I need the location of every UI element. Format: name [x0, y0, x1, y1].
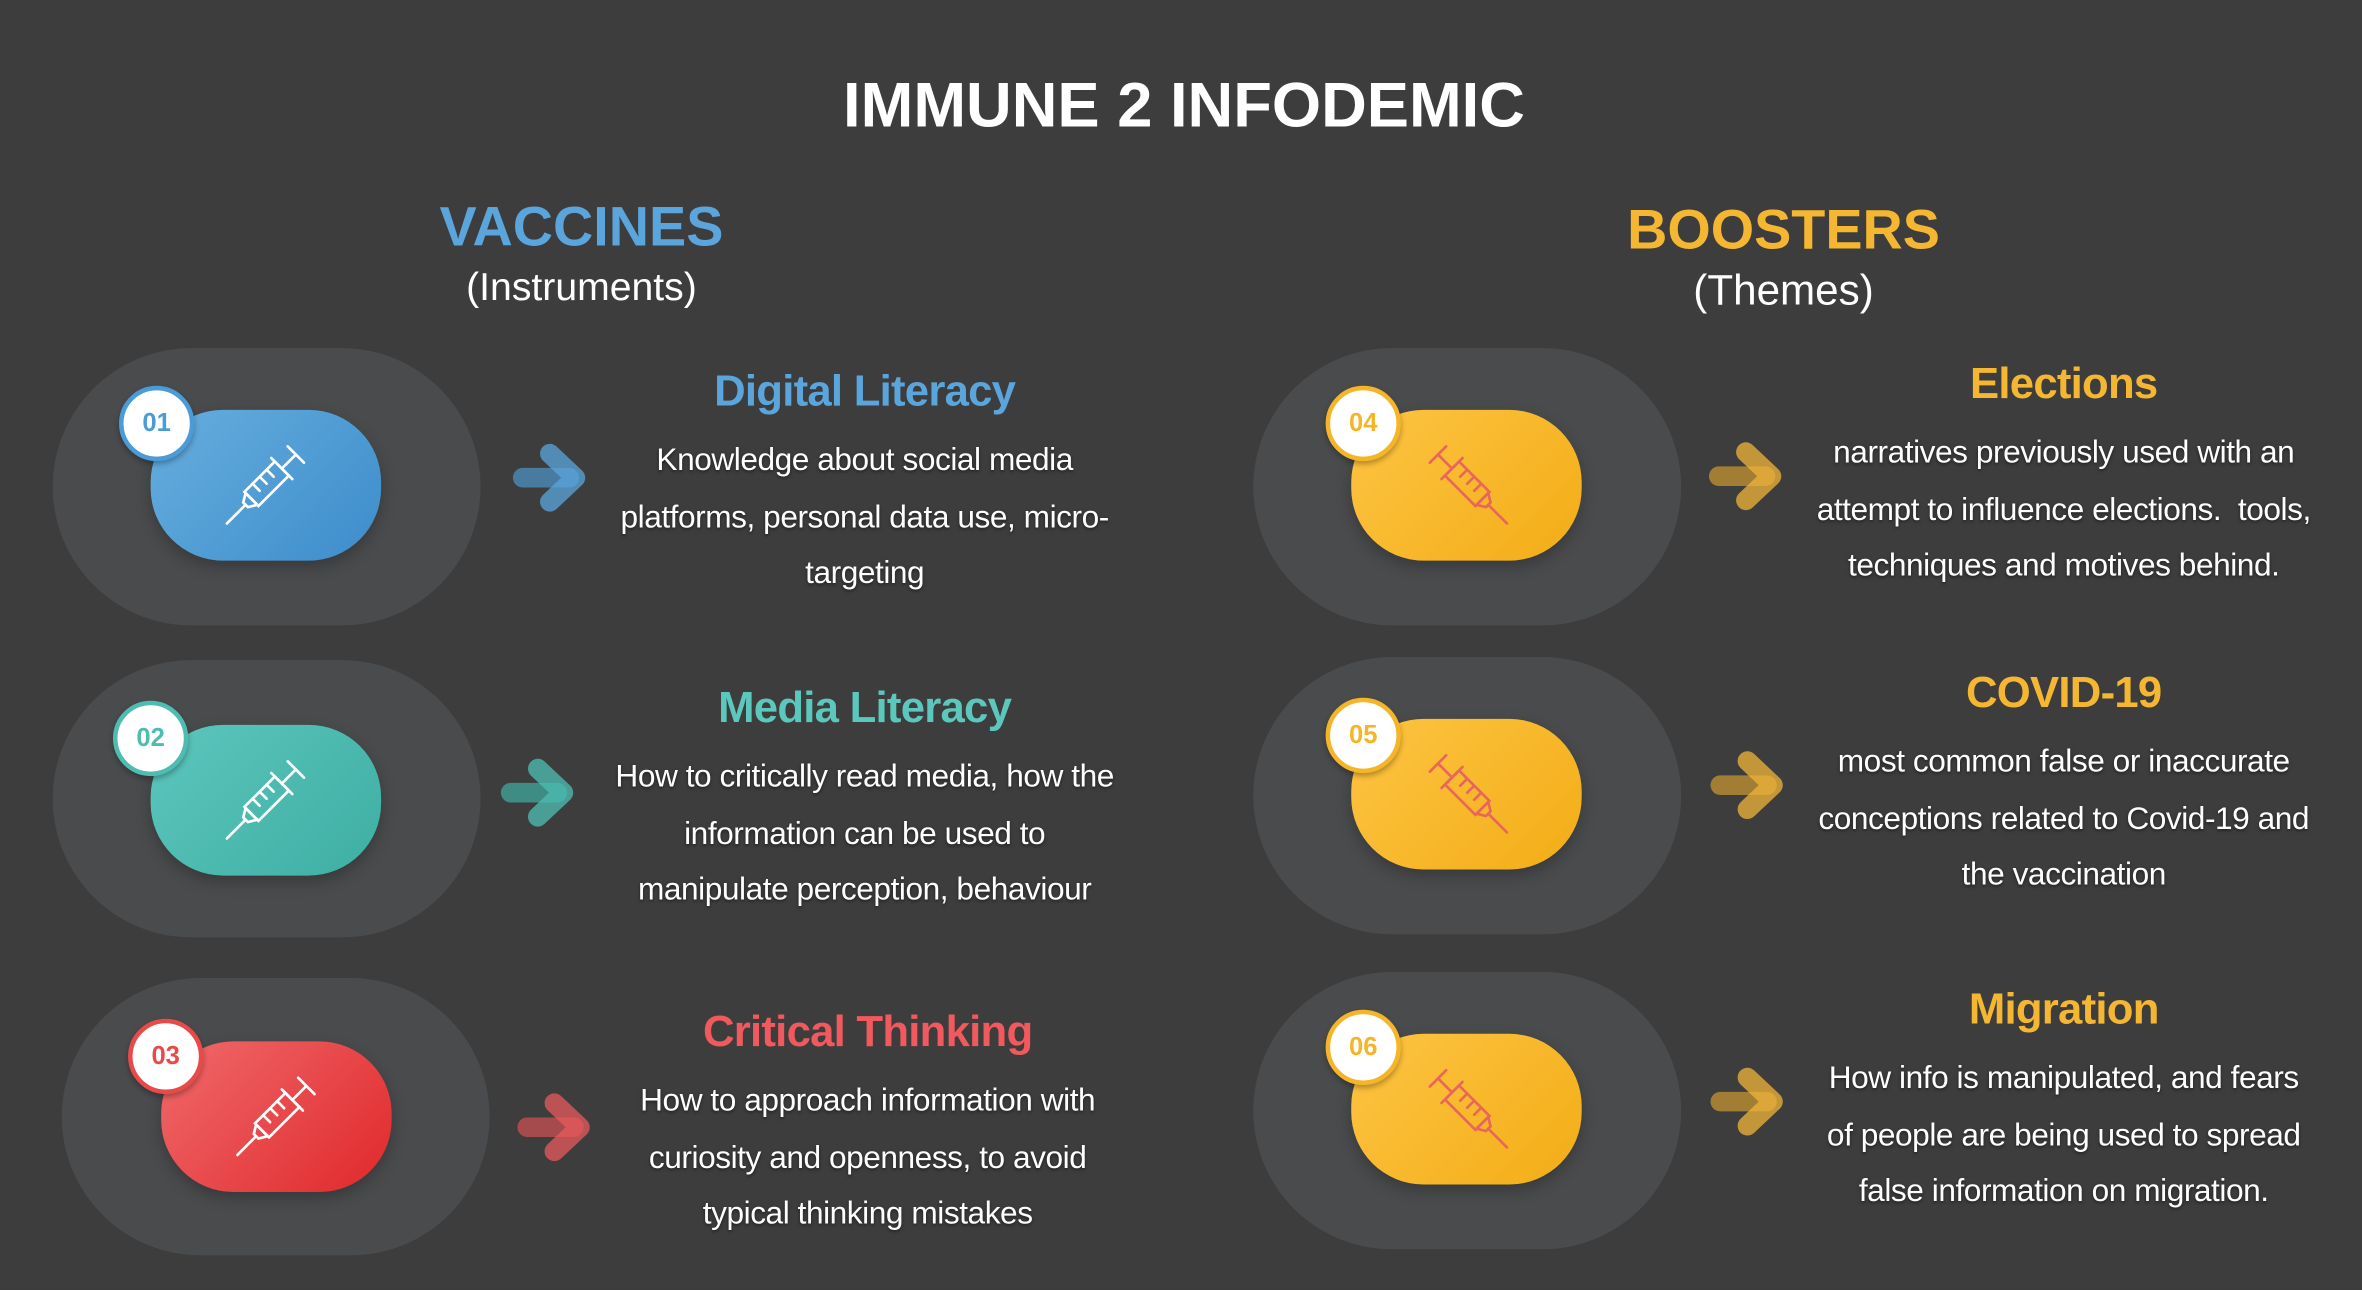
text: migration	[1827, 986, 2301, 1210]
text: critical thinking	[640, 1008, 1095, 1232]
badge 05: 05	[1349, 720, 1378, 749]
text: digital literacy: platforms, personal data use, micro-	[620, 500, 1109, 534]
text: elections: techniques and motives behind.	[1848, 549, 2279, 583]
arrow 6	[1710, 1068, 1783, 1136]
text: covid-19	[1818, 669, 2309, 892]
arrow 3	[517, 1093, 590, 1162]
badge 06	[1326, 1010, 1401, 1085]
panel: 04 elections icon	[1253, 348, 1681, 625]
pill: teal syringe	[151, 725, 381, 876]
badge 02: 02	[136, 723, 165, 752]
text: digital literacy: Digital Literacy	[714, 368, 1015, 416]
heading: vaccines: VACCINES	[440, 196, 723, 258]
text: elections	[1817, 360, 2311, 584]
text: critical thinking: How to approach information with	[640, 1084, 1095, 1118]
text: migration: How info is manipulated, and fears	[1829, 1061, 2299, 1096]
pill: yellow syringe	[1351, 410, 1582, 561]
text: elections: Elections	[1970, 360, 2157, 408]
pill: blue syringe	[151, 410, 381, 561]
arrow 1	[512, 444, 586, 512]
text: media literacy: manipulate perception, behaviour	[638, 873, 1091, 907]
panel: 03 critical thinking icon	[62, 978, 490, 1255]
text: migration: false information on migration.	[1859, 1174, 2269, 1209]
badge 03	[128, 1019, 203, 1094]
panel: 05 covid icon	[1253, 657, 1681, 934]
badge 01: 01	[142, 408, 171, 437]
text: elections: narratives previously used with an	[1833, 436, 2294, 470]
panel: 02 media literacy icon	[53, 660, 481, 937]
title: IMMUNE 2 INFODEMIC	[843, 69, 1525, 140]
pill: red syringe	[161, 1041, 392, 1192]
heading: boosters: BOOSTERS	[1627, 199, 1940, 261]
badge 06: 06	[1349, 1032, 1378, 1061]
text: critical thinking: typical thinking mistakes	[703, 1197, 1033, 1231]
text: media literacy	[615, 684, 1114, 908]
heading: vaccines: (Instruments)	[466, 264, 697, 309]
text: digital literacy	[620, 368, 1109, 592]
text: covid-19: COVID-19	[1966, 669, 2161, 717]
badge 05	[1326, 698, 1401, 773]
heading: boosters: (Themes)	[1693, 267, 1874, 313]
heading: boosters	[1627, 199, 1940, 314]
heading: vaccines	[440, 196, 723, 309]
badge 01	[119, 386, 194, 461]
text: covid-19: conceptions related to Covid-19 and	[1818, 801, 2309, 836]
text: covid-19: most common false or inaccurate	[1838, 744, 2290, 779]
arrow 4	[1709, 442, 1782, 510]
badge 04	[1326, 386, 1401, 461]
text: migration: of people are being used to spread	[1827, 1117, 2301, 1152]
text: critical thinking: curiosity and openness, to avoid	[649, 1140, 1086, 1175]
badge 03: 03	[151, 1041, 180, 1070]
text: media literacy: information can be used to	[684, 816, 1045, 851]
arrow 5	[1710, 751, 1783, 819]
text: migration: Migration	[1969, 986, 2159, 1034]
text: media literacy: How to critically read media, how the	[615, 760, 1114, 794]
text: covid-19: the vaccination	[1962, 857, 2166, 892]
text: critical thinking: Critical Thinking	[703, 1008, 1032, 1056]
text: digital literacy: targeting	[805, 556, 924, 591]
arrow 2	[500, 758, 574, 827]
text: media literacy: Media Literacy	[718, 684, 1011, 732]
panel: 06 migration icon	[1253, 972, 1681, 1249]
badge 04: 04	[1349, 408, 1378, 437]
badge 02	[113, 701, 188, 776]
pill: yellow syringe	[1351, 1034, 1582, 1185]
text: digital literacy: Knowledge about social media	[656, 443, 1073, 478]
pill: yellow syringe	[1351, 719, 1582, 870]
panel: 01 digital literacy icon	[53, 348, 481, 625]
text: elections: attempt to influence elections. tools,	[1817, 492, 2311, 527]
